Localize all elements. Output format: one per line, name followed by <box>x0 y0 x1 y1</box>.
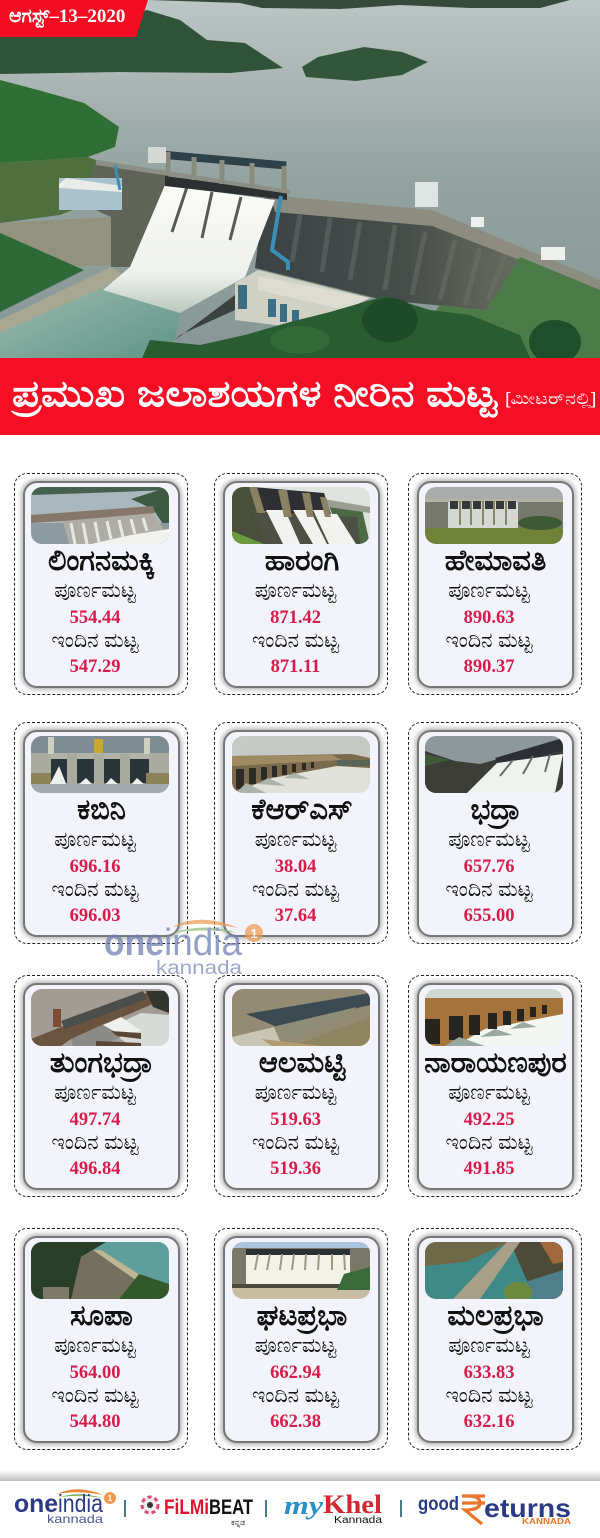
card: Kabini: 696.03 <box>70 906 120 926</box>
logo: mykhel: Kannada <box>334 1515 383 1526</box>
watermark: oneindia kannada: one <box>104 922 164 964</box>
name: ಘಟಪ್ರಭಾ <box>257 1300 347 1332</box>
unit note: [ಮೀಟರ್‌ನಲ್ಲಿ] <box>505 390 596 408</box>
logo: mykhel: Khel <box>323 1490 382 1519</box>
full level: ಪೂರ್ಣಮಟ್ಟ <box>255 1081 336 1104</box>
date tag: ಆಗಸ್ಟ್–13–2020 <box>9 6 125 27</box>
card: Harangi: 871.42 <box>270 608 321 628</box>
logo: filmibeat: BEAT <box>209 1496 253 1519</box>
full level: ಪೂರ್ಣಮಟ್ಟ <box>255 828 336 851</box>
logo: mykhel <box>284 1490 383 1526</box>
today's level: ಇಂದಿನ ಮಟ್ಟ <box>252 878 339 901</box>
photo <box>31 989 169 1046</box>
title banner <box>0 358 600 435</box>
photo <box>31 487 169 544</box>
photo <box>232 736 370 793</box>
watermark: oneindia kannada: 1 <box>250 926 258 941</box>
logo: oneindia: india <box>58 1490 103 1518</box>
name: ಆಲಮಟ್ಟಿ <box>259 1047 345 1079</box>
card: Almatti: 519.36 <box>270 1159 321 1179</box>
name: ಹೇಮಾವತಿ <box>445 545 546 577</box>
separators <box>125 1500 401 1517</box>
card: KRS: 38.04 <box>275 857 316 877</box>
name: ಸೂಪಾ <box>70 1300 133 1332</box>
photo <box>31 1242 169 1299</box>
full level: ಪೂರ್ಣಮಟ್ಟ <box>255 579 336 602</box>
today's level: ಇಂದಿನ ಮಟ್ಟ <box>252 1131 339 1154</box>
footer logos <box>14 1489 571 1528</box>
card: Linganamakki: 554.44 <box>70 608 120 628</box>
logo: oneindia: kannada <box>47 1512 103 1526</box>
card: KRS: 37.64 <box>275 906 316 926</box>
card: Bhadra: 655.00 <box>464 906 514 926</box>
card: Linganamakki <box>14 473 188 695</box>
name: ನಾರಾಯಣಪುರ <box>424 1047 567 1079</box>
card: Narayanapura: 492.25 <box>464 1110 514 1130</box>
today's level: ಇಂದಿನ ಮಟ್ಟ <box>445 1131 533 1154</box>
card: Supa <box>14 1228 188 1450</box>
card: Hemavathi <box>408 473 582 695</box>
card: Bhadra: 657.76 <box>464 857 514 877</box>
card: Supa: 544.80 <box>70 1412 120 1432</box>
logo: goodreturns: good <box>418 1494 459 1515</box>
card: Kabini: 696.16 <box>70 857 120 877</box>
card: Malaprabha: 632.16 <box>464 1412 514 1432</box>
logo: filmibeat: ಕನ್ನಡ <box>231 1518 245 1527</box>
photo <box>232 487 370 544</box>
today's level: ಇಂದಿನ ಮಟ್ಟ <box>252 1384 339 1407</box>
card: Bhadra <box>408 722 582 944</box>
today's level: ಇಂದಿನ ಮಟ್ಟ <box>445 629 533 652</box>
today's level: ಇಂದಿನ ಮಟ್ಟ <box>51 629 139 652</box>
full level: ಪೂರ್ಣಮಟ್ಟ <box>54 579 136 602</box>
photo <box>425 487 563 544</box>
photo <box>425 989 563 1046</box>
card: Tungabhadra: 496.84 <box>70 1159 120 1179</box>
today's level: ಇಂದಿನ ಮಟ್ಟ <box>51 878 139 901</box>
full level: ಪೂರ್ಣಮಟ್ಟ <box>448 579 530 602</box>
card: Hemavathi: 890.37 <box>464 657 514 677</box>
logo: goodreturns: eturns <box>484 1493 571 1523</box>
card: Ghataprabha: 662.94 <box>270 1363 321 1383</box>
card: Harangi: 871.11 <box>271 657 320 677</box>
photo <box>425 1242 563 1299</box>
photo <box>232 1242 370 1299</box>
card: KRS <box>214 722 388 944</box>
card: Malaprabha: 633.83 <box>464 1363 514 1383</box>
name: ಕಬಿನಿ <box>77 794 126 826</box>
logo: oneindia: one <box>14 1490 58 1518</box>
card: Ghataprabha: 662.38 <box>270 1412 321 1432</box>
footer band <box>0 1470 600 1481</box>
name: ತುಂಗಭದ್ರಾ <box>50 1047 153 1079</box>
card: Kabini <box>14 722 188 944</box>
logo: filmibeat <box>142 1496 253 1527</box>
full level: ಪೂರ್ಣಮಟ್ಟ <box>448 1334 530 1357</box>
watermark: oneindia kannada: india <box>164 922 243 964</box>
today's level: ಇಂದಿನ ಮಟ್ಟ <box>51 1384 139 1407</box>
card: Narayanapura: 491.85 <box>464 1159 514 1179</box>
full level: ಪೂರ್ಣಮಟ್ಟ <box>448 1081 530 1104</box>
heading: ಪ್ರಮುಖ ಜಲಾಶಯಗಳ ನೀರಿನ ಮಟ್ಟ <box>12 373 497 414</box>
date tag <box>0 0 148 37</box>
photo <box>232 989 370 1046</box>
card: Hemavathi: 890.63 <box>464 608 514 628</box>
logo: filmibeat: FiLMi <box>164 1496 209 1519</box>
card: Tungabhadra <box>14 975 188 1197</box>
logo: oneindia: 1 <box>108 1494 113 1503</box>
card: Harangi <box>214 473 388 695</box>
card: Linganamakki: 547.29 <box>70 657 120 677</box>
card: Supa: 564.00 <box>70 1363 120 1383</box>
card: Almatti: 519.63 <box>270 1110 321 1130</box>
card: Narayanapura <box>408 975 582 1197</box>
today's level: ಇಂದಿನ ಮಟ್ಟ <box>445 1384 533 1407</box>
name: ಕೆಆರ್‌ಎಸ್ <box>251 794 353 826</box>
logo: oneindia <box>14 1489 116 1526</box>
name: ಹಾರಂಗಿ <box>265 545 339 577</box>
hero photo: dam with open spillway <box>0 0 600 358</box>
full level: ಪೂರ್ಣಮಟ್ಟ <box>448 828 530 851</box>
card: Tungabhadra: 497.74 <box>70 1110 120 1130</box>
name: ಮಲಪ್ರಭಾ <box>447 1300 544 1332</box>
today's level: ಇಂದಿನ ಮಟ್ಟ <box>51 1131 139 1154</box>
full level: ಪೂರ್ಣಮಟ್ಟ <box>255 1334 336 1357</box>
today's level: ಇಂದಿನ ಮಟ್ಟ <box>252 629 339 652</box>
photo <box>425 736 563 793</box>
full level: ಪೂರ್ಣಮಟ್ಟ <box>54 1334 136 1357</box>
card: Malaprabha <box>408 1228 582 1450</box>
logo: goodreturns <box>418 1493 571 1526</box>
card: Ghataprabha <box>214 1228 388 1450</box>
full level: ಪೂರ್ಣಮಟ್ಟ <box>54 1081 136 1104</box>
full level: ಪೂರ್ಣಮಟ್ಟ <box>54 828 136 851</box>
today's level: ಇಂದಿನ ಮಟ್ಟ <box>445 878 533 901</box>
logo: mykhel: my <box>284 1491 324 1520</box>
logo: goodreturns: KANNADA <box>522 1517 571 1526</box>
name: ಲಿಂಗನಮಕ್ಕಿ <box>48 545 155 577</box>
card: Almatti <box>214 975 388 1197</box>
name: ಭದ್ರಾ <box>470 794 521 826</box>
watermark: oneindia kannada <box>104 920 263 978</box>
photo <box>31 736 169 793</box>
